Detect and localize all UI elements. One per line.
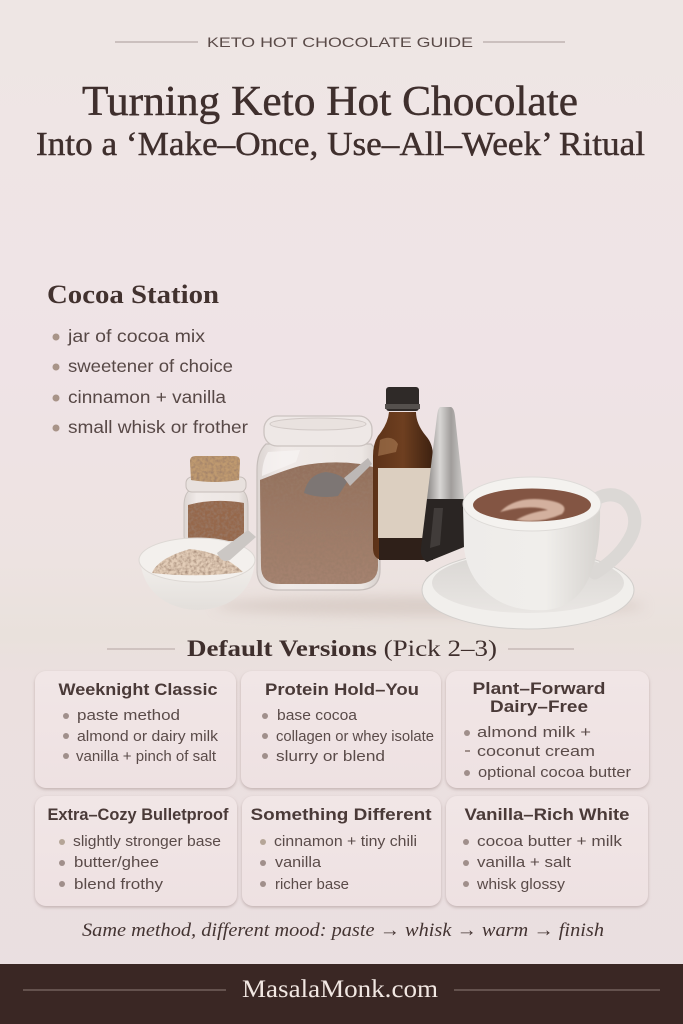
icon: small cocoa jar with cork <box>184 456 248 542</box>
icon: saucer <box>422 551 634 629</box>
list: cocoa station items: small whisk or frother <box>68 417 248 437</box>
icon: silver-topped frother <box>421 407 464 562</box>
panel: extra-cozy bulletproof: butter/ghee <box>74 854 159 871</box>
icon: white bowl of sweetener with spoon <box>139 530 256 610</box>
panel: something different: Something Different <box>250 806 432 824</box>
panel: something different: richer base <box>275 876 349 893</box>
section heading: default versions: Default Versions (Pick 2–3) <box>187 636 497 661</box>
panel: vanilla-rich white: cocoa butter + milk <box>477 833 623 850</box>
panel: vanilla-rich white: Vanilla–Rich White <box>464 806 630 824</box>
panel: weeknight classic <box>35 671 236 788</box>
panel: plant-forward dairy-free: Plant–Forward <box>472 680 606 698</box>
panel: weeknight classic: Weeknight Classic <box>58 681 217 699</box>
panel: vanilla-rich white: vanilla + salt <box>477 854 572 871</box>
title: Turning Keto Hot Chocolate <box>82 79 578 125</box>
panel: protein hold-you: base cocoa <box>277 707 358 724</box>
illustration: hot chocolate still life <box>139 387 645 629</box>
panel: weeknight classic: almond or dairy milk <box>77 728 219 745</box>
list: cocoa station items: sweetener of choice <box>68 356 233 376</box>
panel: protein hold-you: collagen or whey isolate <box>276 728 434 745</box>
panel: vanilla-rich white <box>446 796 648 906</box>
panel: weeknight classic: vanilla + pinch of salt <box>76 748 217 765</box>
panel: plant-forward dairy-free <box>446 671 649 788</box>
title <box>36 79 645 163</box>
icon: mug of hot chocolate <box>463 477 635 610</box>
footer band <box>0 964 683 1024</box>
heading: cocoa station: Cocoa Station <box>47 280 220 309</box>
eyebrow heading: KETO HOT CHOCOLATE GUIDE <box>207 34 473 50</box>
panel: protein hold-you <box>241 671 441 788</box>
panel: extra-cozy bulletproof: slightly stronger base <box>73 833 221 850</box>
panel: something different: vanilla <box>275 854 322 871</box>
panel: protein hold-you: Protein Hold–You <box>265 681 419 699</box>
footer band: MasalaMonk.com <box>242 976 439 1003</box>
panel: extra-cozy bulletproof: blend frothy <box>74 876 164 893</box>
list: cocoa station items: cinnamon + vanilla <box>68 387 226 407</box>
panel: weeknight classic: paste method <box>77 707 180 724</box>
panel: cocoa station <box>47 280 248 437</box>
title: Into a ‘Make–Once, Use–All–Week’ Ritual <box>36 126 645 163</box>
panel: something different <box>242 796 441 906</box>
list: cocoa station items <box>52 326 248 437</box>
panel: plant-forward dairy-free: almond milk + <box>477 724 591 741</box>
panel: plant-forward dairy-free: Dairy–Free <box>490 698 588 716</box>
list: cocoa station items: jar of cocoa mix <box>67 326 205 346</box>
panel: extra-cozy bulletproof: Extra–Cozy Bulletproof <box>48 806 229 824</box>
tagline: Same method, different mood: paste → whisk → warm → finish <box>82 920 604 941</box>
table shadow <box>215 596 645 616</box>
panel: extra-cozy bulletproof <box>35 796 237 906</box>
panel: something different: cinnamon + tiny chili <box>274 833 417 850</box>
icon: large glass jar of cocoa mix <box>257 416 380 590</box>
panel: vanilla-rich white: whisk glossy <box>476 876 566 893</box>
panel: plant-forward dairy-free: coconut cream <box>477 743 595 760</box>
panel: plant-forward dairy-free: optional cocoa butter <box>478 764 631 781</box>
panel: protein hold-you: slurry or blend <box>276 748 385 765</box>
icon: amber vanilla bottle <box>373 387 433 560</box>
